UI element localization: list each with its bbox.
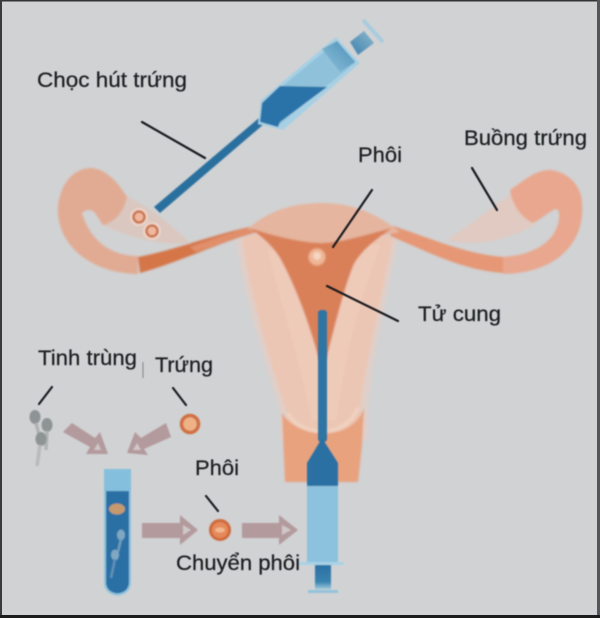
label: Chuyển phôi: Chuyển phôi [176, 552, 300, 575]
embryo [210, 520, 230, 540]
uterus halo [236, 210, 398, 440]
label: Phôi (uterus): Phôi [358, 144, 402, 167]
arrow: embryo to syringe [242, 515, 298, 545]
label: Phôi (embryo): Phôi [195, 457, 239, 480]
egg [182, 416, 198, 432]
label lines [39, 122, 497, 511]
uterine wall inner highlight [268, 240, 380, 420]
label: Chọc hút trứng: Chọc hút trứng [37, 69, 187, 92]
retrieval syringe [154, 20, 383, 213]
arrow: sperm to tube [63, 423, 108, 454]
left fallopian tube and fimbria [58, 168, 258, 274]
uterus dome [248, 203, 400, 245]
arrow: egg to tube [127, 423, 171, 455]
cervix rim [288, 408, 358, 432]
uterine cavity [250, 228, 392, 360]
right ovary [447, 192, 536, 243]
uterus outer body [242, 215, 393, 440]
test tube [104, 469, 131, 596]
label: Buồng trứng: Buồng trứng [464, 127, 587, 150]
embryo in uterus [308, 248, 326, 266]
left ovary [100, 192, 190, 244]
label: Tử cung: Tử cung [418, 303, 501, 326]
label: Trứng: Trứng [155, 354, 213, 377]
arrow: tube to embryo [142, 515, 198, 545]
right fallopian tube and fimbria [390, 170, 582, 274]
eggs at ovary [130, 208, 161, 240]
sperm group [30, 410, 52, 466]
label: Tinh trùng: Tinh trùng [38, 347, 137, 370]
cervix [282, 408, 364, 482]
transfer syringe [299, 310, 344, 593]
